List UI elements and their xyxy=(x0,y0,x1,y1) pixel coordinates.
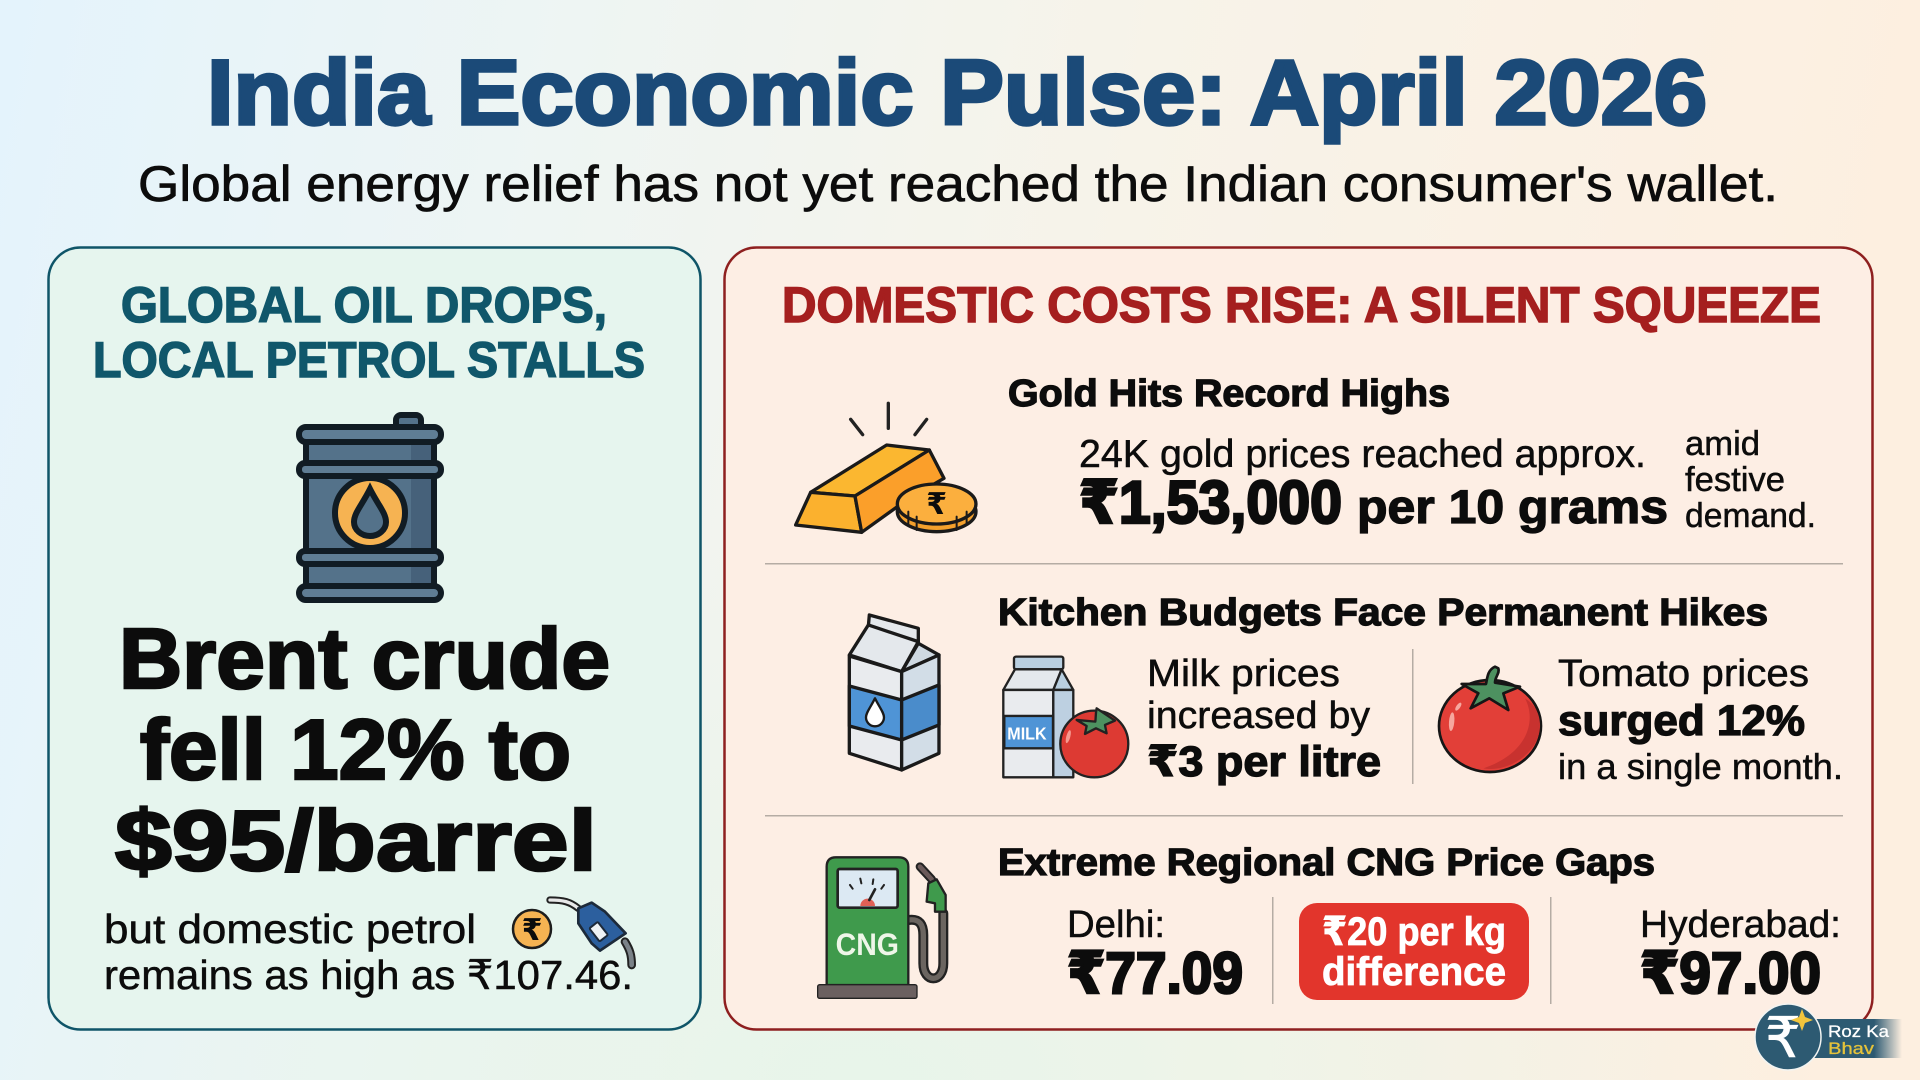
key figure: Brent crude xyxy=(115,612,610,889)
section: kitchen budgets xyxy=(849,592,1843,787)
text: tomato prices: Tomato prices xyxy=(1558,653,1809,695)
logo: Roz Ka Bhav: ₹ xyxy=(1765,1006,1801,1069)
icon: CNG pump xyxy=(818,857,946,998)
panel: domestic costs rise xyxy=(724,248,1872,1030)
icon: milk carton and tomato: MILK xyxy=(1007,723,1047,743)
heading: domestic costs rise: DOMESTIC COSTS RISE: A SILENT SQUEEZE xyxy=(782,277,1821,333)
text: domestic petrol xyxy=(104,906,633,998)
icon: milk carton and tomato xyxy=(1003,657,1128,777)
stat: Hyderabad: Hyderabad: xyxy=(1640,904,1841,946)
callout: 20 per kg difference: ₹20 per kg xyxy=(1322,910,1506,954)
callout: 20 per kg difference xyxy=(1299,903,1529,1000)
text: 24K gold price: 24K gold prices reached approx. xyxy=(1079,433,1646,476)
stat: Hyderabad xyxy=(1640,904,1841,1006)
text: milk prices xyxy=(1147,653,1381,786)
title: India Economic Pulse: April 2026 xyxy=(207,42,1707,144)
icon: oil barrel xyxy=(299,415,441,600)
icon: tomato xyxy=(1439,667,1541,772)
text: tomato prices: in a single month. xyxy=(1558,746,1843,787)
stat: Delhi xyxy=(1067,904,1243,1006)
callout: 20 per kg difference: difference xyxy=(1322,950,1506,994)
icon: CNG pump: CNG xyxy=(836,926,899,962)
logo: Roz Ka Bhav: Roz Ka xyxy=(1828,1022,1890,1041)
text: 24K gold price xyxy=(1079,433,1668,536)
heading: global oil drops xyxy=(93,277,645,388)
text: 24K gold price: ₹1,53,000 xyxy=(1079,469,1342,536)
text: milk prices: Milk prices xyxy=(1147,653,1340,695)
icon: gold bar and coin: ₹ xyxy=(926,488,947,521)
icon: milk carton large xyxy=(849,615,939,770)
heading: gold hits record highs: Gold Hits Record Highs xyxy=(1008,373,1450,415)
text: milk prices: ₹3 per litre xyxy=(1147,738,1381,786)
text: domestic petrol: remains as high as ₹107.46. xyxy=(104,952,633,998)
heading: global oil drops: LOCAL PETROL STALLS xyxy=(93,332,645,388)
logo: Roz Ka Bhav: Bhav xyxy=(1828,1039,1875,1058)
section: CNG xyxy=(818,842,1841,1006)
icon: gold bar and coin xyxy=(796,403,976,532)
icon: rupee coin xyxy=(513,910,551,948)
heading: kitchen budgets: Kitchen Budgets Face Permanent Hikes xyxy=(998,592,1768,634)
key figure: Brent crude: Brent crude xyxy=(119,612,610,707)
text: tomato prices xyxy=(1558,653,1843,787)
text: amid festive demand: demand. xyxy=(1685,497,1816,535)
icon: rupee coin: ₹ xyxy=(522,914,542,947)
heading: CNG price gaps: Extreme Regional CNG Price Gaps xyxy=(998,842,1655,884)
text: tomato prices: surged 12% xyxy=(1558,697,1805,745)
heading: global oil drops: GLOBAL OIL DROPS, xyxy=(121,277,607,333)
section: gold xyxy=(796,373,1816,536)
stat: Delhi: Delhi: xyxy=(1067,904,1165,946)
stat: Hyderabad: ₹97.00 xyxy=(1640,941,1821,1006)
text: amid festive demand: amid xyxy=(1685,425,1760,463)
panel: global oil drops xyxy=(48,248,700,1030)
text: milk prices: increased by xyxy=(1147,695,1370,737)
logo: Roz Ka Bhav xyxy=(1755,1004,1902,1070)
key figure: Brent crude: $95/barrel xyxy=(115,794,597,889)
text: amid festive demand xyxy=(1685,425,1816,535)
icon: fuel nozzle xyxy=(550,900,632,965)
subtitle: Global energy relief has not yet reached the Indian consumer's wallet. xyxy=(138,156,1778,212)
text: 24K gold price: per 10 grams xyxy=(1357,480,1668,533)
text: domestic petrol: but domestic petrol xyxy=(104,906,476,952)
stat: Delhi: ₹77.09 xyxy=(1067,941,1243,1006)
text: amid festive demand: festive xyxy=(1685,461,1785,499)
key figure: Brent crude: fell 12% to xyxy=(140,703,571,798)
